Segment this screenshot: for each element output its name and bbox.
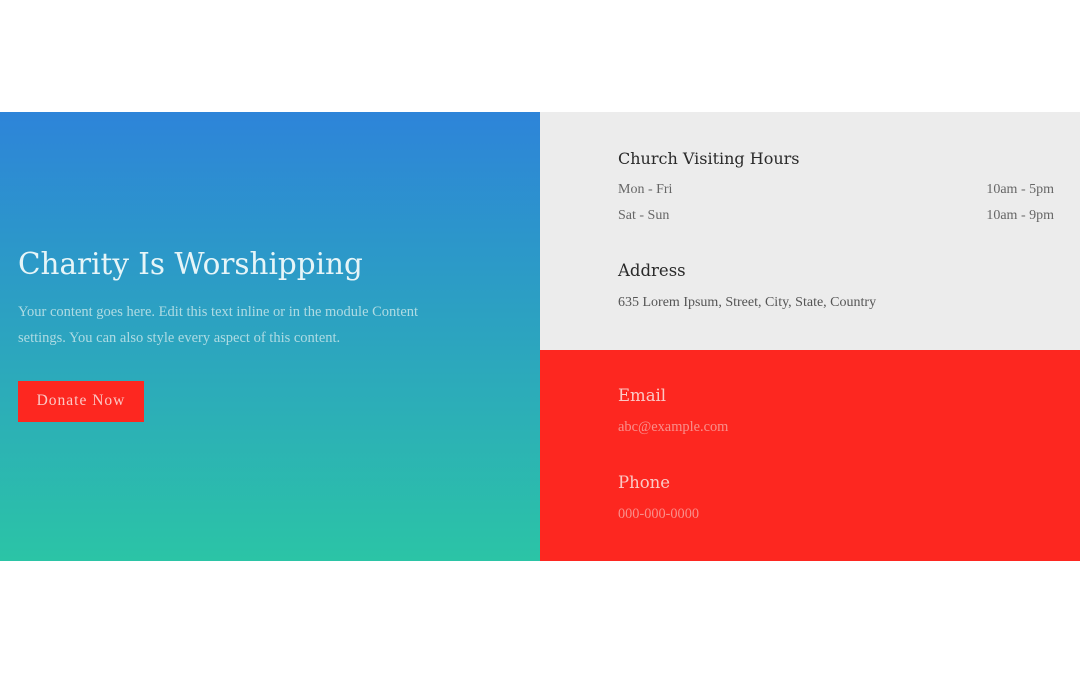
panel: contact details xyxy=(540,350,1080,561)
text: weekday hours: 10am - 5pm xyxy=(986,182,1054,197)
panel: charity gradient xyxy=(0,112,540,561)
text: address: 635 Lorem Ipsum, Street, City, State, Country xyxy=(618,295,876,310)
text: weekend hours xyxy=(618,208,1054,223)
heading: address: Address xyxy=(618,261,686,280)
text: weekday hours xyxy=(618,182,1054,197)
text block: description: Your content goes here. Edit this text inline or in the module Content xyxy=(18,304,418,320)
button: donate now xyxy=(18,381,144,422)
panel: hours and address xyxy=(540,112,1080,350)
text block: description xyxy=(18,304,418,346)
text block: description: settings. You can also style every aspect of this content. xyxy=(18,330,340,346)
text: weekend hours: 10am - 9pm xyxy=(986,208,1054,223)
text: weekend hours: Sat - Sun xyxy=(618,208,669,223)
text: phone number: 000-000-0000 xyxy=(618,506,699,522)
button: donate now: Donate Now xyxy=(37,392,125,409)
heading: phone: Phone xyxy=(618,473,670,492)
text: email address: abc@example.com xyxy=(618,419,728,435)
heading: email: Email xyxy=(618,386,666,405)
text: weekday hours: Mon - Fri xyxy=(618,182,672,197)
title: Charity Is Worshipping xyxy=(18,247,363,282)
heading: church visiting hours: Church Visiting Hours xyxy=(618,149,800,168)
